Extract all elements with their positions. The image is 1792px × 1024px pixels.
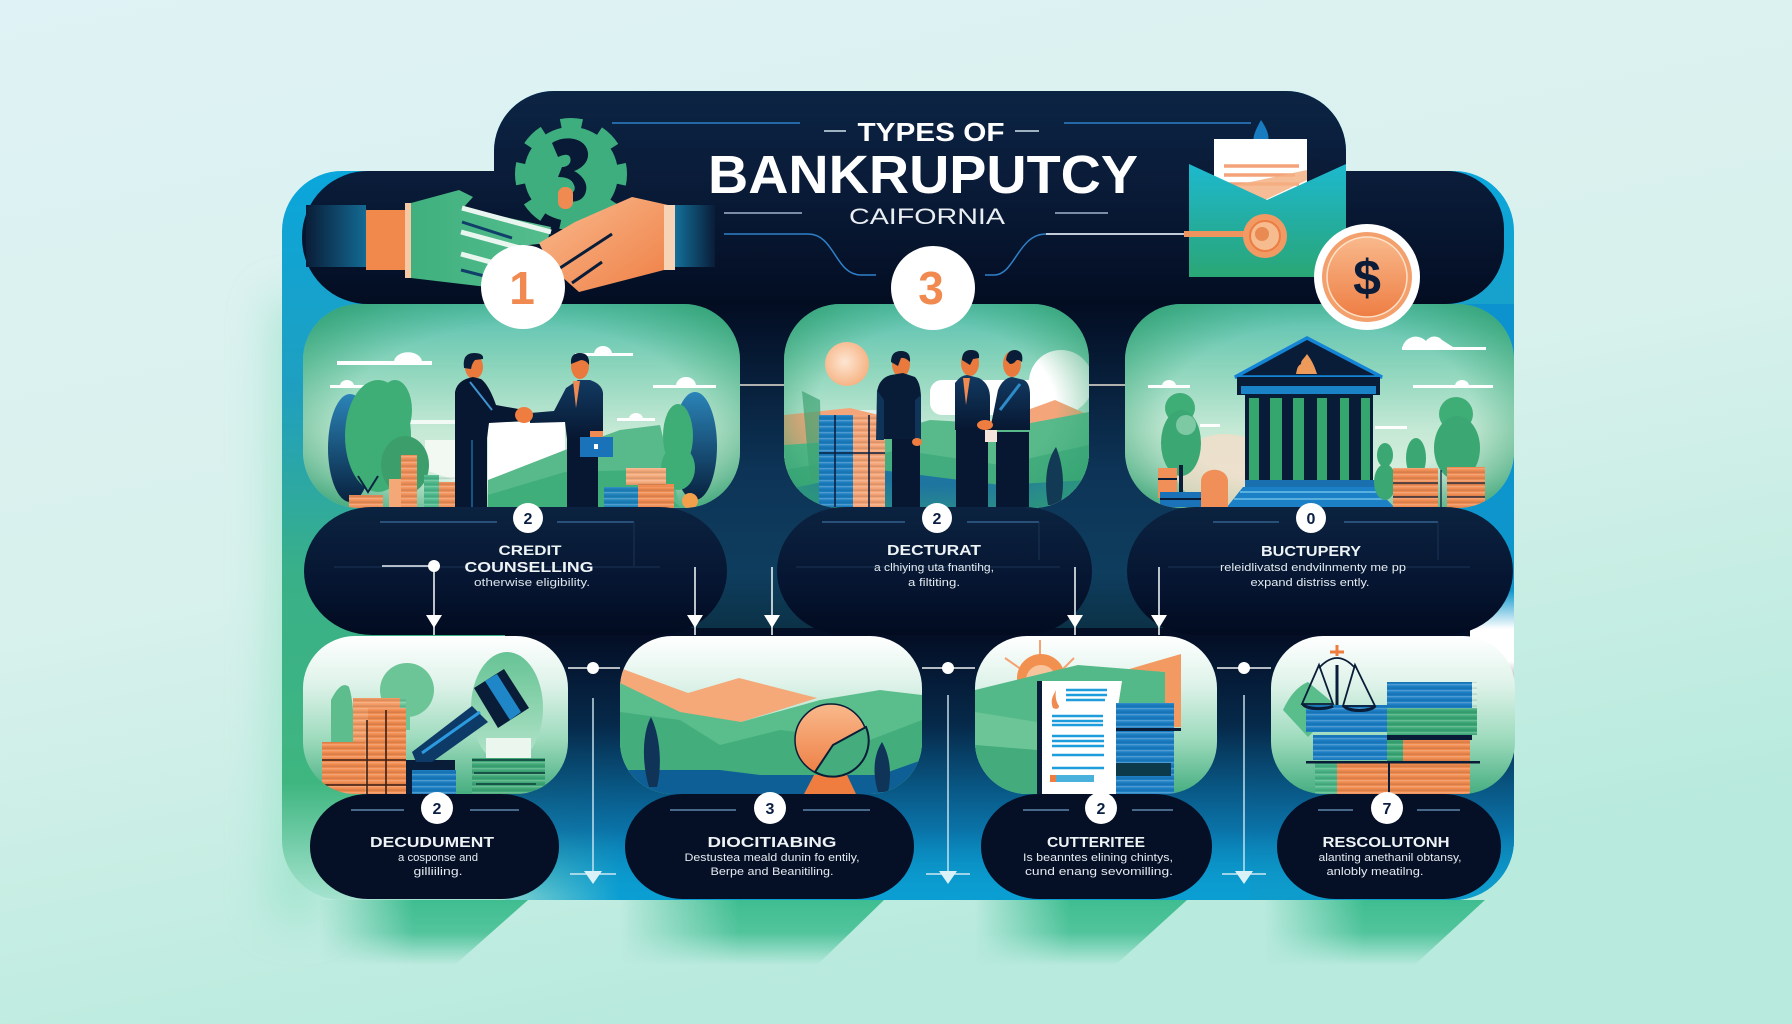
panel: step label declaration: 2	[933, 511, 942, 528]
badge: number 1: 1	[509, 262, 535, 314]
icon: sun	[1004, 640, 1075, 680]
icon: handshake	[306, 190, 715, 292]
panel: step label discharging	[625, 792, 914, 899]
panel: step label document: 2	[433, 801, 442, 818]
panel: step label document: DECUDUMENT	[370, 834, 494, 851]
panel: step label discharging: DIOCITIABING	[708, 834, 836, 851]
panel: step label cutterite: Is beanntes elining chintys,	[1023, 852, 1173, 864]
panel: step label bankruptcy: 0	[1307, 511, 1316, 528]
plant right	[1046, 447, 1063, 505]
panel: step label resolution: 7	[1383, 801, 1392, 818]
book and coin stacks left	[349, 455, 456, 508]
panel: step label declaration: a filtiting.	[908, 577, 960, 589]
panel: step label document: gilliiling.	[414, 866, 462, 878]
stack right	[472, 738, 545, 794]
panel: step label declaration	[777, 503, 1092, 635]
badge: number 3: 3	[918, 262, 944, 314]
panel: step label document: a cosponse and	[398, 852, 478, 864]
title	[708, 117, 1138, 229]
figure: man c	[977, 350, 1030, 507]
panel: step label resolution	[1277, 792, 1501, 899]
panel: step label resolution: RESCOLUTONH	[1322, 834, 1450, 851]
plants	[644, 717, 660, 787]
title: BANKRUPUTCY	[708, 145, 1138, 205]
books	[1116, 703, 1181, 795]
panel: step label discharging: Destustea meald dunin fo entily,	[684, 852, 860, 864]
panel: scales and books illustration	[1271, 636, 1515, 794]
tree	[380, 663, 434, 717]
panel: step label bankruptcy: expand distriss ently.	[1250, 577, 1370, 589]
panel: step label cutterite: 2	[1097, 801, 1106, 818]
trees right	[681, 392, 717, 500]
panel: step label resolution: anlobly meatilng.	[1326, 866, 1424, 878]
panel: step label declaration: a clhiying uta fnantihg,	[874, 562, 994, 574]
figure: man left	[455, 353, 525, 508]
panel: document gavel illustration	[303, 636, 568, 794]
icon: sun	[825, 342, 869, 386]
ground shadow bands	[326, 900, 1485, 962]
figure: man right	[515, 353, 613, 507]
clouds	[330, 346, 716, 424]
hill scene	[488, 422, 565, 480]
books	[819, 415, 885, 507]
icon: gear	[523, 126, 619, 222]
panel: step label discharging: 3	[766, 801, 775, 818]
panel: step label resolution: alanting anethanil obtansy,	[1318, 852, 1462, 864]
panel: step label credit counselling: CREDIT	[498, 542, 562, 558]
clouds	[858, 350, 1089, 415]
panel: discharging hills illustration	[620, 636, 922, 794]
trees and stacks right	[1374, 397, 1485, 508]
panel: step label document	[310, 792, 559, 899]
badge: number 1	[481, 245, 565, 329]
header decorative lines	[612, 123, 1251, 275]
panel: step label bankruptcy: BUCTUPERY	[1261, 543, 1361, 560]
panel: step label credit counselling	[304, 503, 727, 635]
panel: step label bankruptcy	[1127, 503, 1513, 635]
panel: step label cutterite	[981, 792, 1212, 899]
book stacks right	[604, 468, 698, 509]
icon: document	[1037, 681, 1122, 794]
plant left	[802, 391, 820, 466]
panel: main diagram backing	[282, 91, 1516, 900]
soft green glow behind panel	[272, 300, 322, 920]
panel: step label credit counselling: otherwise eligibility.	[474, 577, 590, 589]
arrows: row two connectors	[568, 662, 1271, 884]
panel: declaration illustration	[784, 304, 1093, 508]
icon: envelope with letter and seal	[1184, 120, 1346, 277]
badge: dollar coin: $	[1353, 250, 1381, 306]
figure: man a	[876, 351, 922, 507]
panel: step label credit counselling: COUNSELLING	[464, 559, 594, 576]
badge: number 3	[891, 246, 975, 330]
panel: step label cutterite: cund enang sevomilling.	[1025, 866, 1173, 878]
title: TYPES OF	[858, 117, 1004, 147]
trees left	[328, 394, 364, 502]
arrows: row one down connectors	[382, 560, 1167, 635]
trees left	[1158, 393, 1228, 507]
hills	[784, 400, 1089, 508]
panel: courthouse illustration	[1125, 304, 1514, 508]
icon: orb pie	[795, 704, 869, 794]
clouds	[1148, 336, 1493, 429]
stacks	[1306, 682, 1480, 794]
panel: credit counselling illustration	[303, 304, 740, 509]
title: CAIFORNIA	[849, 204, 1005, 229]
icon: courthouse	[1227, 338, 1394, 507]
icon: scales	[1302, 645, 1375, 711]
connector: between top cards	[740, 384, 1125, 386]
panel: document and books illustration	[975, 636, 1217, 795]
panel: step label bankruptcy: releidlivatsd endvilnmenty me pp	[1220, 562, 1406, 574]
books	[322, 698, 406, 794]
panel: step label cutterite: CUTTERITEE	[1047, 834, 1145, 851]
header dark banner	[302, 91, 1504, 304]
figure: man b	[955, 350, 990, 507]
panel: step label discharging: Berpe and Beanitiling.	[710, 866, 834, 878]
badge: dollar coin	[1314, 224, 1420, 330]
panel: step label declaration: DECTURAT	[887, 542, 981, 559]
icon: gavel	[406, 669, 529, 794]
panel: step label credit counselling: 2	[524, 511, 533, 528]
